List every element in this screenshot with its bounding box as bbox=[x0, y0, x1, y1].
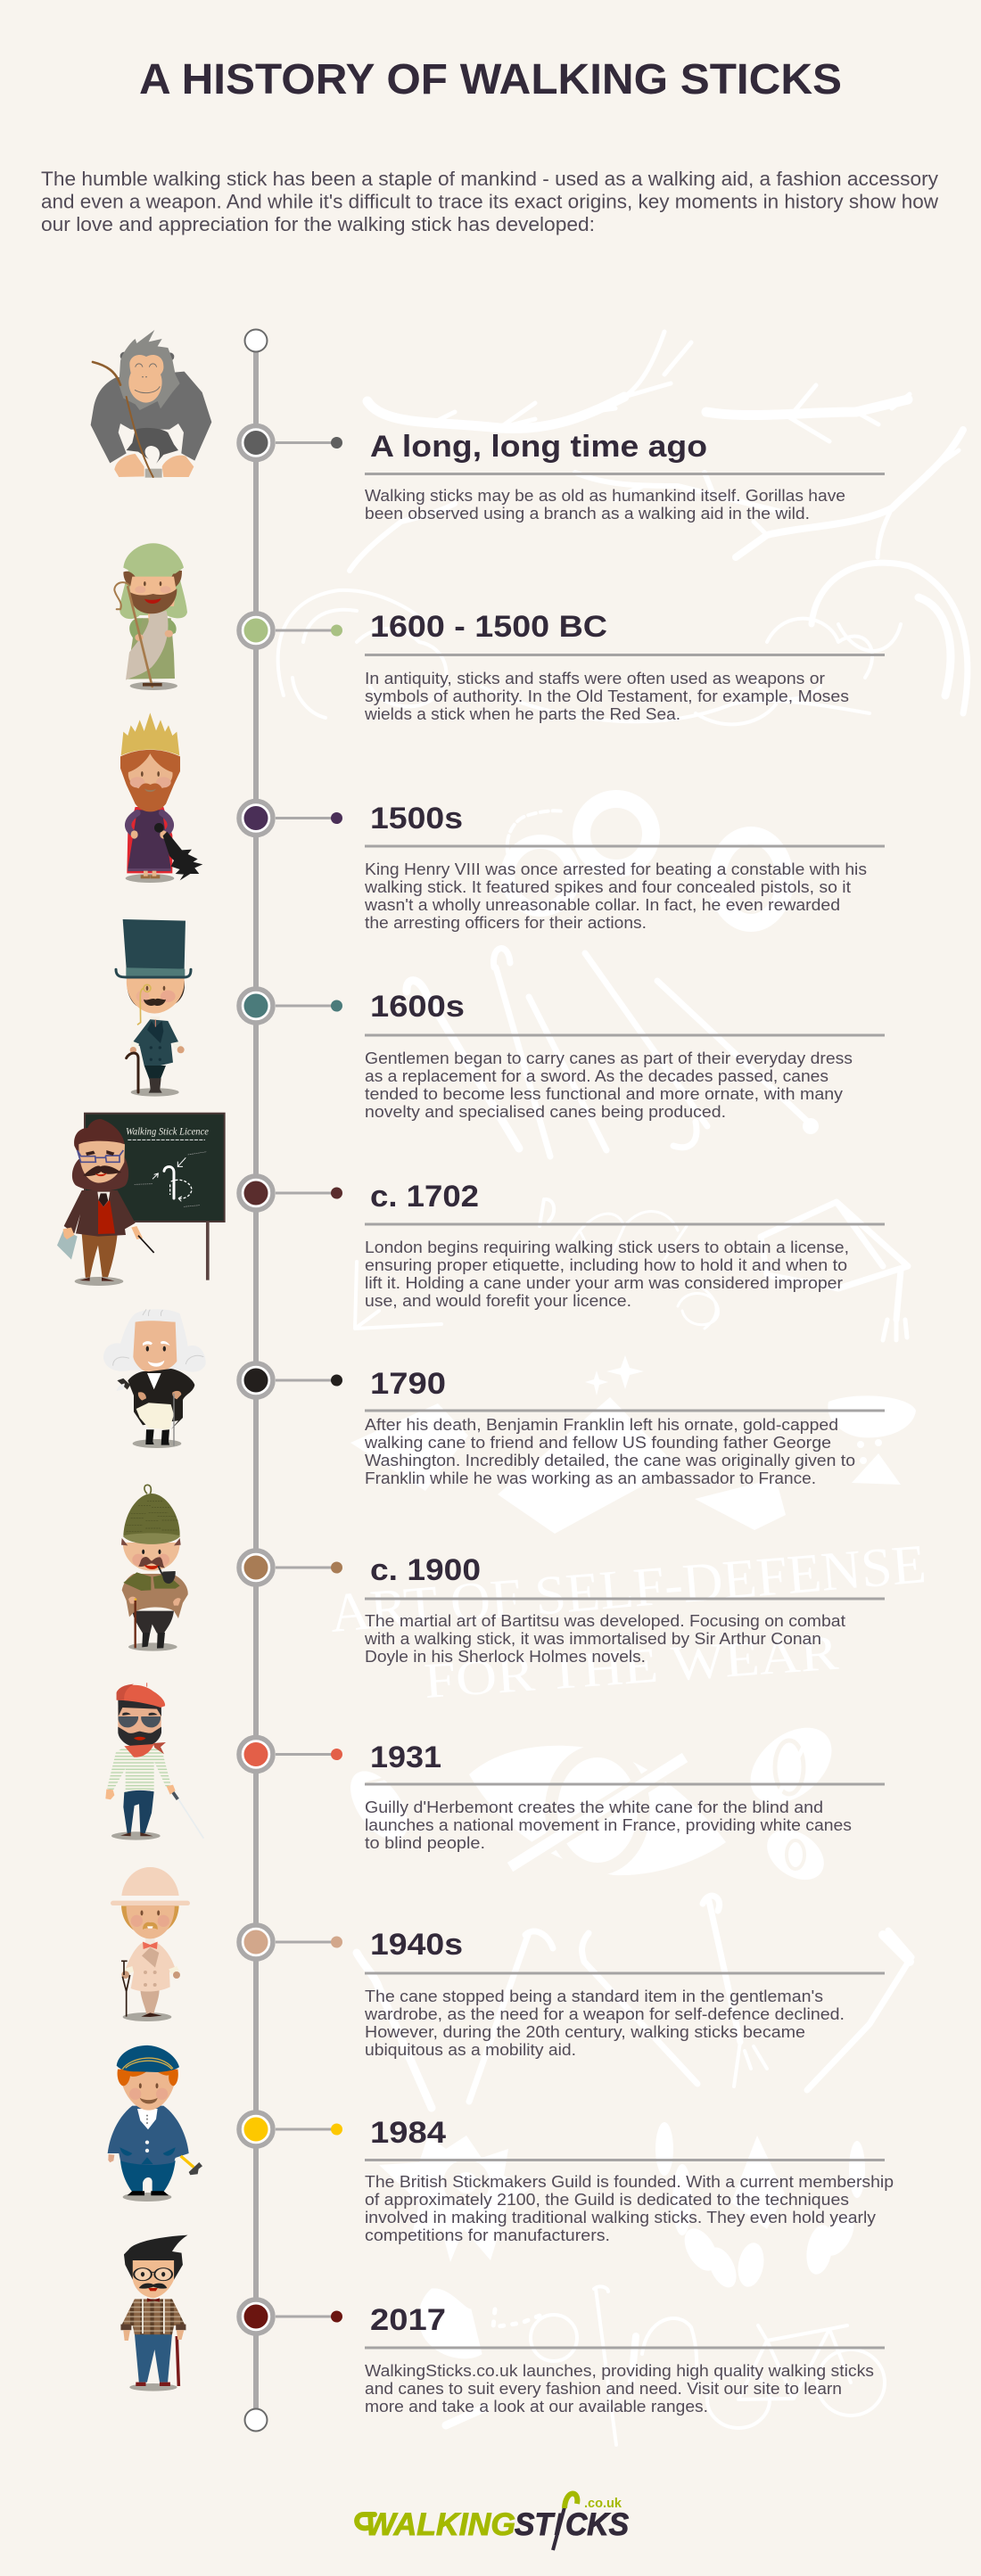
body text: been observed using a branch as a walking aid in the wild. bbox=[365, 504, 810, 523]
body text: of approximately 2100, the Guild is dedicated to the techniques bbox=[365, 2190, 849, 2209]
heading: 1500s bbox=[370, 802, 463, 835]
body text bbox=[365, 2172, 894, 2244]
body text: involved in making traditional walking sticks. They even hold yearly bbox=[365, 2208, 877, 2226]
rule bbox=[365, 1223, 885, 1225]
body text: as a replacement for a sword. As the decades passed, canes bbox=[365, 1066, 828, 1085]
title: A HISTORY OF WALKING STICKS bbox=[139, 56, 842, 103]
heading: 1600 - 1500 BC bbox=[370, 610, 607, 644]
rule bbox=[365, 2159, 885, 2161]
character: stickmaker with hammer bbox=[108, 2045, 202, 2202]
rule bbox=[365, 1972, 885, 1974]
intro paragraph: The humble walking stick has been a staple of mankind - used as a walking aid, a fashion accessory bbox=[41, 168, 938, 190]
timeline node bbox=[239, 1363, 342, 1397]
timeline node bbox=[239, 613, 342, 647]
heading: 1940s bbox=[370, 1928, 463, 1962]
heading: c. 1900 bbox=[370, 1553, 481, 1587]
character: Sherlock Holmes with pipe bbox=[121, 1485, 188, 1651]
body text: King Henry VIII was once arrested for beating a constable with his bbox=[365, 860, 867, 878]
body text: launches a national movement in France, providing white canes bbox=[365, 1815, 852, 1834]
body text: use, and would forefit your licence. bbox=[365, 1291, 631, 1310]
character: shepherd with staff bbox=[114, 543, 187, 690]
background art: canes bbox=[407, 949, 819, 1156]
body text bbox=[365, 1049, 853, 1121]
timeline spine bbox=[244, 330, 268, 2431]
body text: the arresting officers for their actions. bbox=[365, 913, 647, 932]
body text bbox=[364, 669, 849, 723]
body text bbox=[364, 860, 867, 932]
character: teacher at licence blackboard bbox=[57, 1114, 225, 1286]
timeline node bbox=[239, 801, 342, 835]
body text: walking cane to friend and fellow US founding father George bbox=[364, 1433, 831, 1452]
background art: parting waves bbox=[278, 563, 968, 724]
background art: self-defense poster lettering bbox=[327, 1534, 928, 1709]
milestone: c. 1702 bbox=[57, 1114, 885, 1310]
background art: stars, diamonds and hat bbox=[350, 1355, 916, 1534]
body text bbox=[365, 486, 845, 523]
body text: WalkingSticks.co.uk launches, providing high quality walking sticks bbox=[365, 2361, 874, 2380]
body text: symbols of authority. In the Old Testament, for example, Moses bbox=[365, 687, 849, 705]
milestone: 1600s bbox=[116, 919, 885, 1121]
logo: WalkingSticks.co.uk bbox=[357, 2494, 629, 2550]
logo: WalkingSticks.co.uk: I bbox=[554, 2507, 564, 2542]
timeline node bbox=[239, 1925, 342, 1959]
body text: The cane stopped being a standard item in the gentleman's bbox=[365, 1987, 823, 2005]
background art: mortarboard, book and licence bbox=[355, 1199, 908, 1340]
milestone: 1790 bbox=[103, 1309, 885, 1487]
rule bbox=[365, 473, 885, 475]
body text: walking stick. It featured spikes and four concealed pistols, so it bbox=[364, 877, 851, 896]
body text: and canes to suit every fashion and need. Visit our site to learn bbox=[365, 2379, 842, 2398]
heading: A long, long time ago bbox=[370, 430, 707, 464]
milestone: 2017 bbox=[120, 2235, 885, 2416]
background art: guild sun and leaves bbox=[379, 2122, 865, 2292]
timeline node bbox=[239, 426, 342, 460]
body text: wields a stick when he parts the Red Sea. bbox=[364, 704, 680, 723]
body text: The British Stickmakers Guild is founded. With a current membership bbox=[365, 2172, 894, 2191]
body text bbox=[365, 1238, 849, 1310]
body text: Washington. Incredibly detailed, the cane was originally given to bbox=[365, 1451, 855, 1469]
body text: wasn't a wholly unreasonable collar. In fact, he even rewarded bbox=[364, 895, 840, 914]
body text: ensuring proper etiquette, including how to hold it and when to bbox=[365, 1255, 847, 1274]
rule bbox=[365, 1598, 885, 1600]
body text: wardrobe, as the need for a weapon for self-defence declined. bbox=[364, 2004, 845, 2023]
timeline node bbox=[239, 1737, 342, 1771]
heading: 1600s bbox=[370, 990, 465, 1024]
timeline node bbox=[239, 989, 342, 1023]
body text bbox=[365, 2361, 874, 2416]
milestone: c. 1900 bbox=[121, 1485, 885, 1666]
background art: crossed-out eyes bbox=[339, 1713, 846, 1890]
background art: self-defense poster lettering: ART OF SELF-DEFENSE bbox=[327, 1534, 928, 1644]
logo: WalkingSticks.co.uk: WALKING bbox=[366, 2507, 515, 2542]
background art: self-defense poster lettering: FOR THE WEAR bbox=[423, 1625, 841, 1709]
rule bbox=[365, 1034, 885, 1036]
character: gorilla with branch bbox=[91, 330, 211, 478]
milestone: 1600 - 1500 BC bbox=[114, 543, 885, 723]
background art: branches bbox=[350, 332, 963, 571]
body text: Franklin while he was working as an ambassador to France. bbox=[365, 1469, 816, 1487]
body text: competitions for manufacturers. bbox=[365, 2226, 610, 2244]
body text: After his death, Benjamin Franklin left his ornate, gold-capped bbox=[365, 1415, 838, 1434]
timeline node bbox=[239, 2300, 342, 2333]
milestone: 1984 bbox=[108, 2045, 894, 2244]
heading: 1790 bbox=[370, 1367, 446, 1401]
character: teacher at licence blackboard: Walking Stick Licence bbox=[126, 1127, 209, 1138]
logo: WalkingSticks.co.uk: .co.uk bbox=[584, 2496, 622, 2511]
character: Benjamin Franklin bbox=[103, 1309, 206, 1448]
logo: WalkingSticks.co.uk: ST bbox=[515, 2507, 556, 2542]
heading: 1931 bbox=[370, 1741, 441, 1774]
heading: 2017 bbox=[370, 2303, 446, 2337]
body text: more and take a look at our available ranges. bbox=[365, 2397, 708, 2416]
body text: Gentlemen began to carry canes as part of their everyday dress bbox=[365, 1049, 853, 1067]
milestone: 1931 bbox=[105, 1683, 885, 1852]
background art: handcuffs bbox=[507, 799, 785, 923]
rule bbox=[365, 1409, 885, 1412]
timeline node bbox=[239, 2112, 342, 2146]
body text: with a walking stick, it was immortalised by Sir Arthur Conan bbox=[364, 1629, 821, 1648]
body text bbox=[364, 1611, 845, 1666]
background art: mobility canes and crutch bbox=[357, 1896, 911, 2108]
character: King Henry VIII with spiked stick bbox=[120, 712, 202, 883]
milestone: a long, long time ago bbox=[91, 330, 885, 523]
body text: The martial art of Bartitsu was developed. Focusing on combat bbox=[365, 1611, 845, 1630]
body text: ubiquitous as a mobility aid. bbox=[365, 2040, 576, 2059]
body text: to blind people. bbox=[365, 1833, 485, 1852]
logo: WalkingSticks.co.uk: CKS bbox=[565, 2507, 629, 2542]
character: man in beret with white cane bbox=[105, 1683, 203, 1840]
rule bbox=[365, 1783, 885, 1785]
milestone: 1940s bbox=[111, 1867, 885, 2059]
body text bbox=[365, 1798, 852, 1852]
rule bbox=[365, 845, 885, 847]
rule bbox=[365, 654, 885, 656]
body text: Guilly d'Herbemont creates the white cane for the blind and bbox=[365, 1798, 823, 1816]
heading: c. 1702 bbox=[370, 1180, 479, 1214]
milestone: 1500s bbox=[120, 712, 885, 932]
body text: Doyle in his Sherlock Holmes novels. bbox=[365, 1647, 646, 1666]
character: gentleman in top hat bbox=[116, 919, 191, 1097]
background art: bicycle and accessories bbox=[419, 2286, 885, 2445]
body text: In antiquity, sticks and staffs were often used as weapons or bbox=[365, 669, 825, 687]
intro paragraph: and even a weapon. And while it's difficult to trace its exact origins, key moments in history show how bbox=[41, 191, 938, 212]
character: modern hipster with cane bbox=[120, 2235, 188, 2391]
rule bbox=[365, 2347, 885, 2349]
body text: tended to become less functional and more ornate, with many bbox=[365, 1084, 844, 1103]
body text: novelty and specialised canes being produced. bbox=[365, 1102, 726, 1121]
body text bbox=[364, 1987, 845, 2059]
body text bbox=[364, 1415, 855, 1487]
intro paragraph: our love and appreciation for the walking stick has developed: bbox=[41, 213, 595, 235]
character: gentleman in pith hat with crutch bbox=[111, 1867, 190, 2021]
body text: Walking sticks may be as old as humankind itself. Gorillas have bbox=[365, 486, 845, 505]
body text: lift it. Holding a cane under your arm was considered improper bbox=[365, 1273, 843, 1292]
body text: London begins requiring walking stick users to obtain a license, bbox=[365, 1238, 849, 1256]
intro paragraph bbox=[41, 168, 938, 235]
timeline node bbox=[239, 1176, 342, 1210]
heading: 1984 bbox=[370, 2116, 446, 2150]
timeline node bbox=[239, 1551, 342, 1584]
body text: However, during the 20th century, walking sticks became bbox=[365, 2022, 805, 2041]
